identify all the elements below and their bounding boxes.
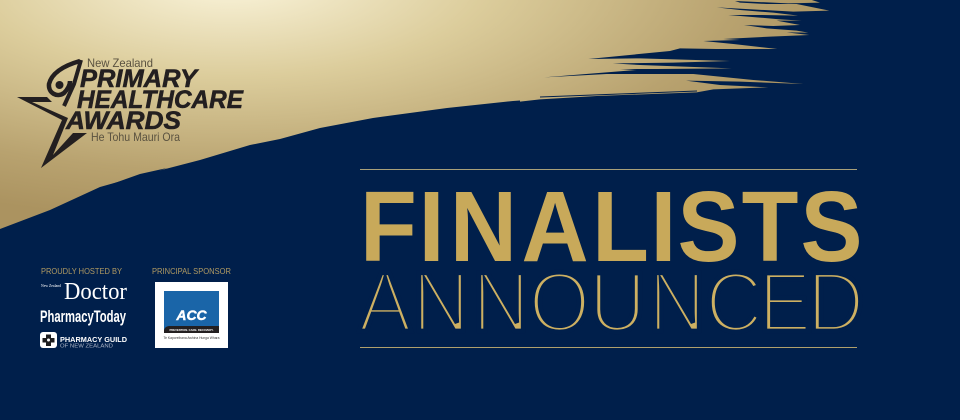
hosted by block	[40, 267, 128, 350]
awards: AWARDS	[65, 107, 181, 135]
icon: star with koru	[17, 60, 87, 168]
acc logo card: ACC	[175, 307, 208, 323]
principal sponsor block	[152, 267, 231, 348]
pharmacy today logo: PharmacyToday	[40, 307, 126, 326]
pharmacy guild logo	[40, 332, 128, 350]
gold brush stroke banner	[0, 0, 829, 229]
sponsor label: PRINCIPAL SPONSOR	[152, 267, 231, 276]
doctor logo: New Zealand	[41, 283, 62, 288]
hosted by label: PROUDLY HOSTED BY	[41, 267, 123, 276]
top divider	[360, 169, 857, 170]
acc logo card: Te Kaporeihana Awhina Hunga Whara	[164, 336, 220, 340]
doctor logo: Doctor	[64, 279, 127, 305]
he tohu mauri ora: He Tohu Mauri Ora	[91, 130, 180, 144]
primary: PRIMARY	[80, 65, 199, 93]
acc logo card: PREVENTION. CARE. RECOVERY.	[170, 328, 214, 332]
finalists heading: FINALISTS	[360, 172, 863, 283]
awards logo	[17, 56, 244, 168]
acc logo card	[155, 282, 228, 348]
icon: guild cross	[40, 332, 57, 348]
announced heading: ANNOUNCED	[359, 256, 864, 350]
bottom divider	[360, 347, 857, 348]
pharmacy guild logo: PHARMACY GUILD	[60, 335, 128, 344]
healthcare: HEALTHCARE	[77, 86, 244, 114]
new zealand label: New Zealand	[87, 56, 153, 70]
pharmacy guild logo: OF NEW ZEALAND	[60, 344, 113, 350]
